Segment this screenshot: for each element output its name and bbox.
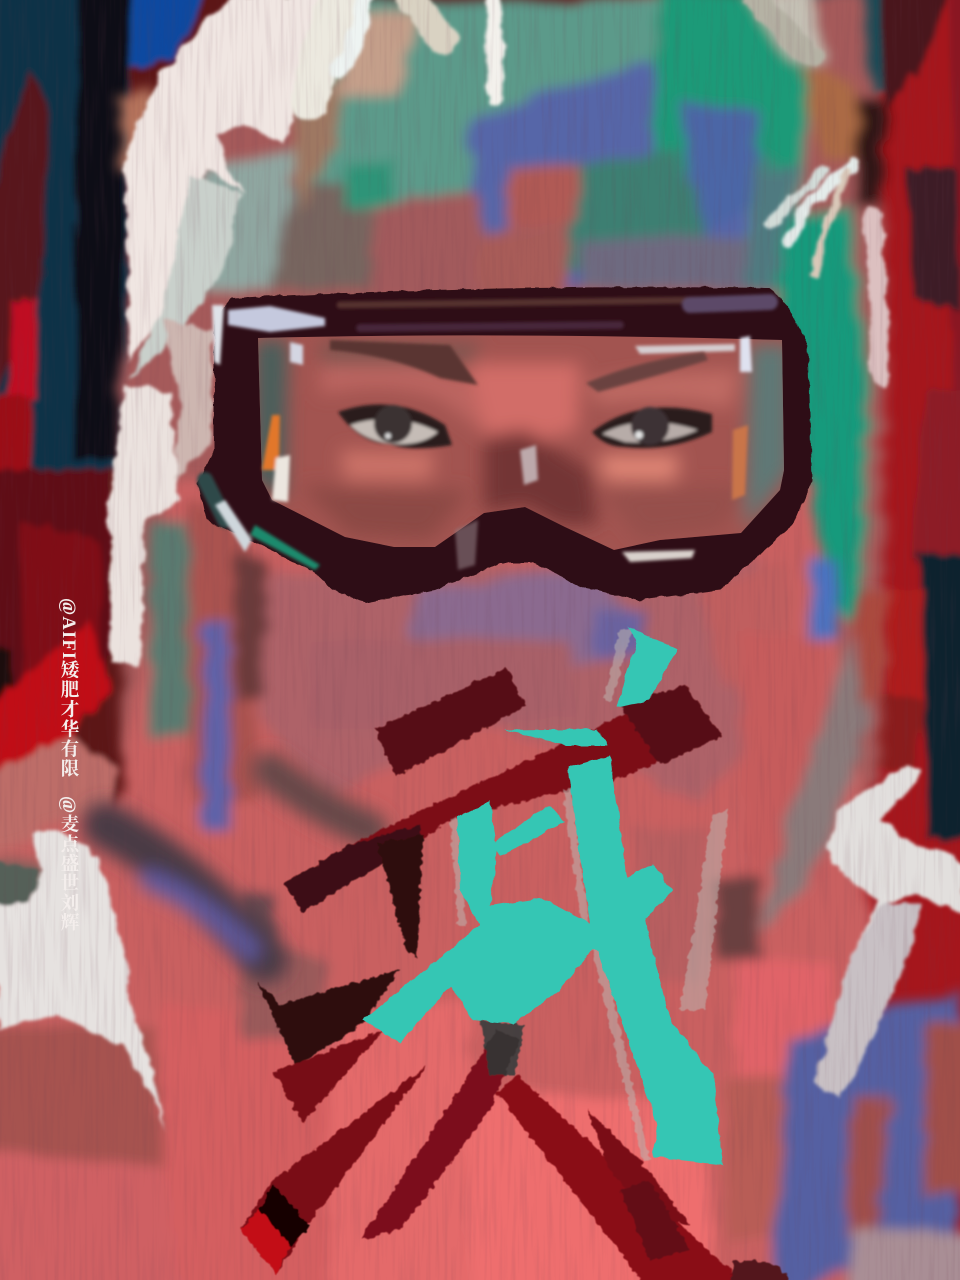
dark strokes: crossed-out character (240, 668, 792, 1280)
vertical artist credit: @AIFI矮肥才华有限 @麦点盛世刘辉 (58, 598, 78, 933)
white shoulder paint left (0, 830, 166, 1135)
goggle lens with face (250, 330, 790, 560)
teal strokes (363, 626, 723, 1165)
mask and suit body (0, 480, 960, 1280)
white shoulder paint right (815, 765, 960, 1098)
dark and purple diagonal shadow on neck (5, 770, 370, 960)
goggles (198, 287, 812, 603)
eye right (592, 407, 712, 448)
large calligraphy character (240, 626, 792, 1280)
goggle frame (198, 287, 812, 603)
hood of protective suit (118, 0, 885, 1000)
eyebrow right (586, 352, 708, 392)
eye left (338, 404, 452, 448)
grey fringe beside teal strokes (450, 630, 728, 1160)
goggle reflections (212, 305, 752, 570)
white paint on hood (108, 0, 345, 665)
white brush strokes on hood (310, 0, 880, 380)
goggle frame streaks (205, 300, 770, 520)
eyebrow left (330, 340, 478, 385)
